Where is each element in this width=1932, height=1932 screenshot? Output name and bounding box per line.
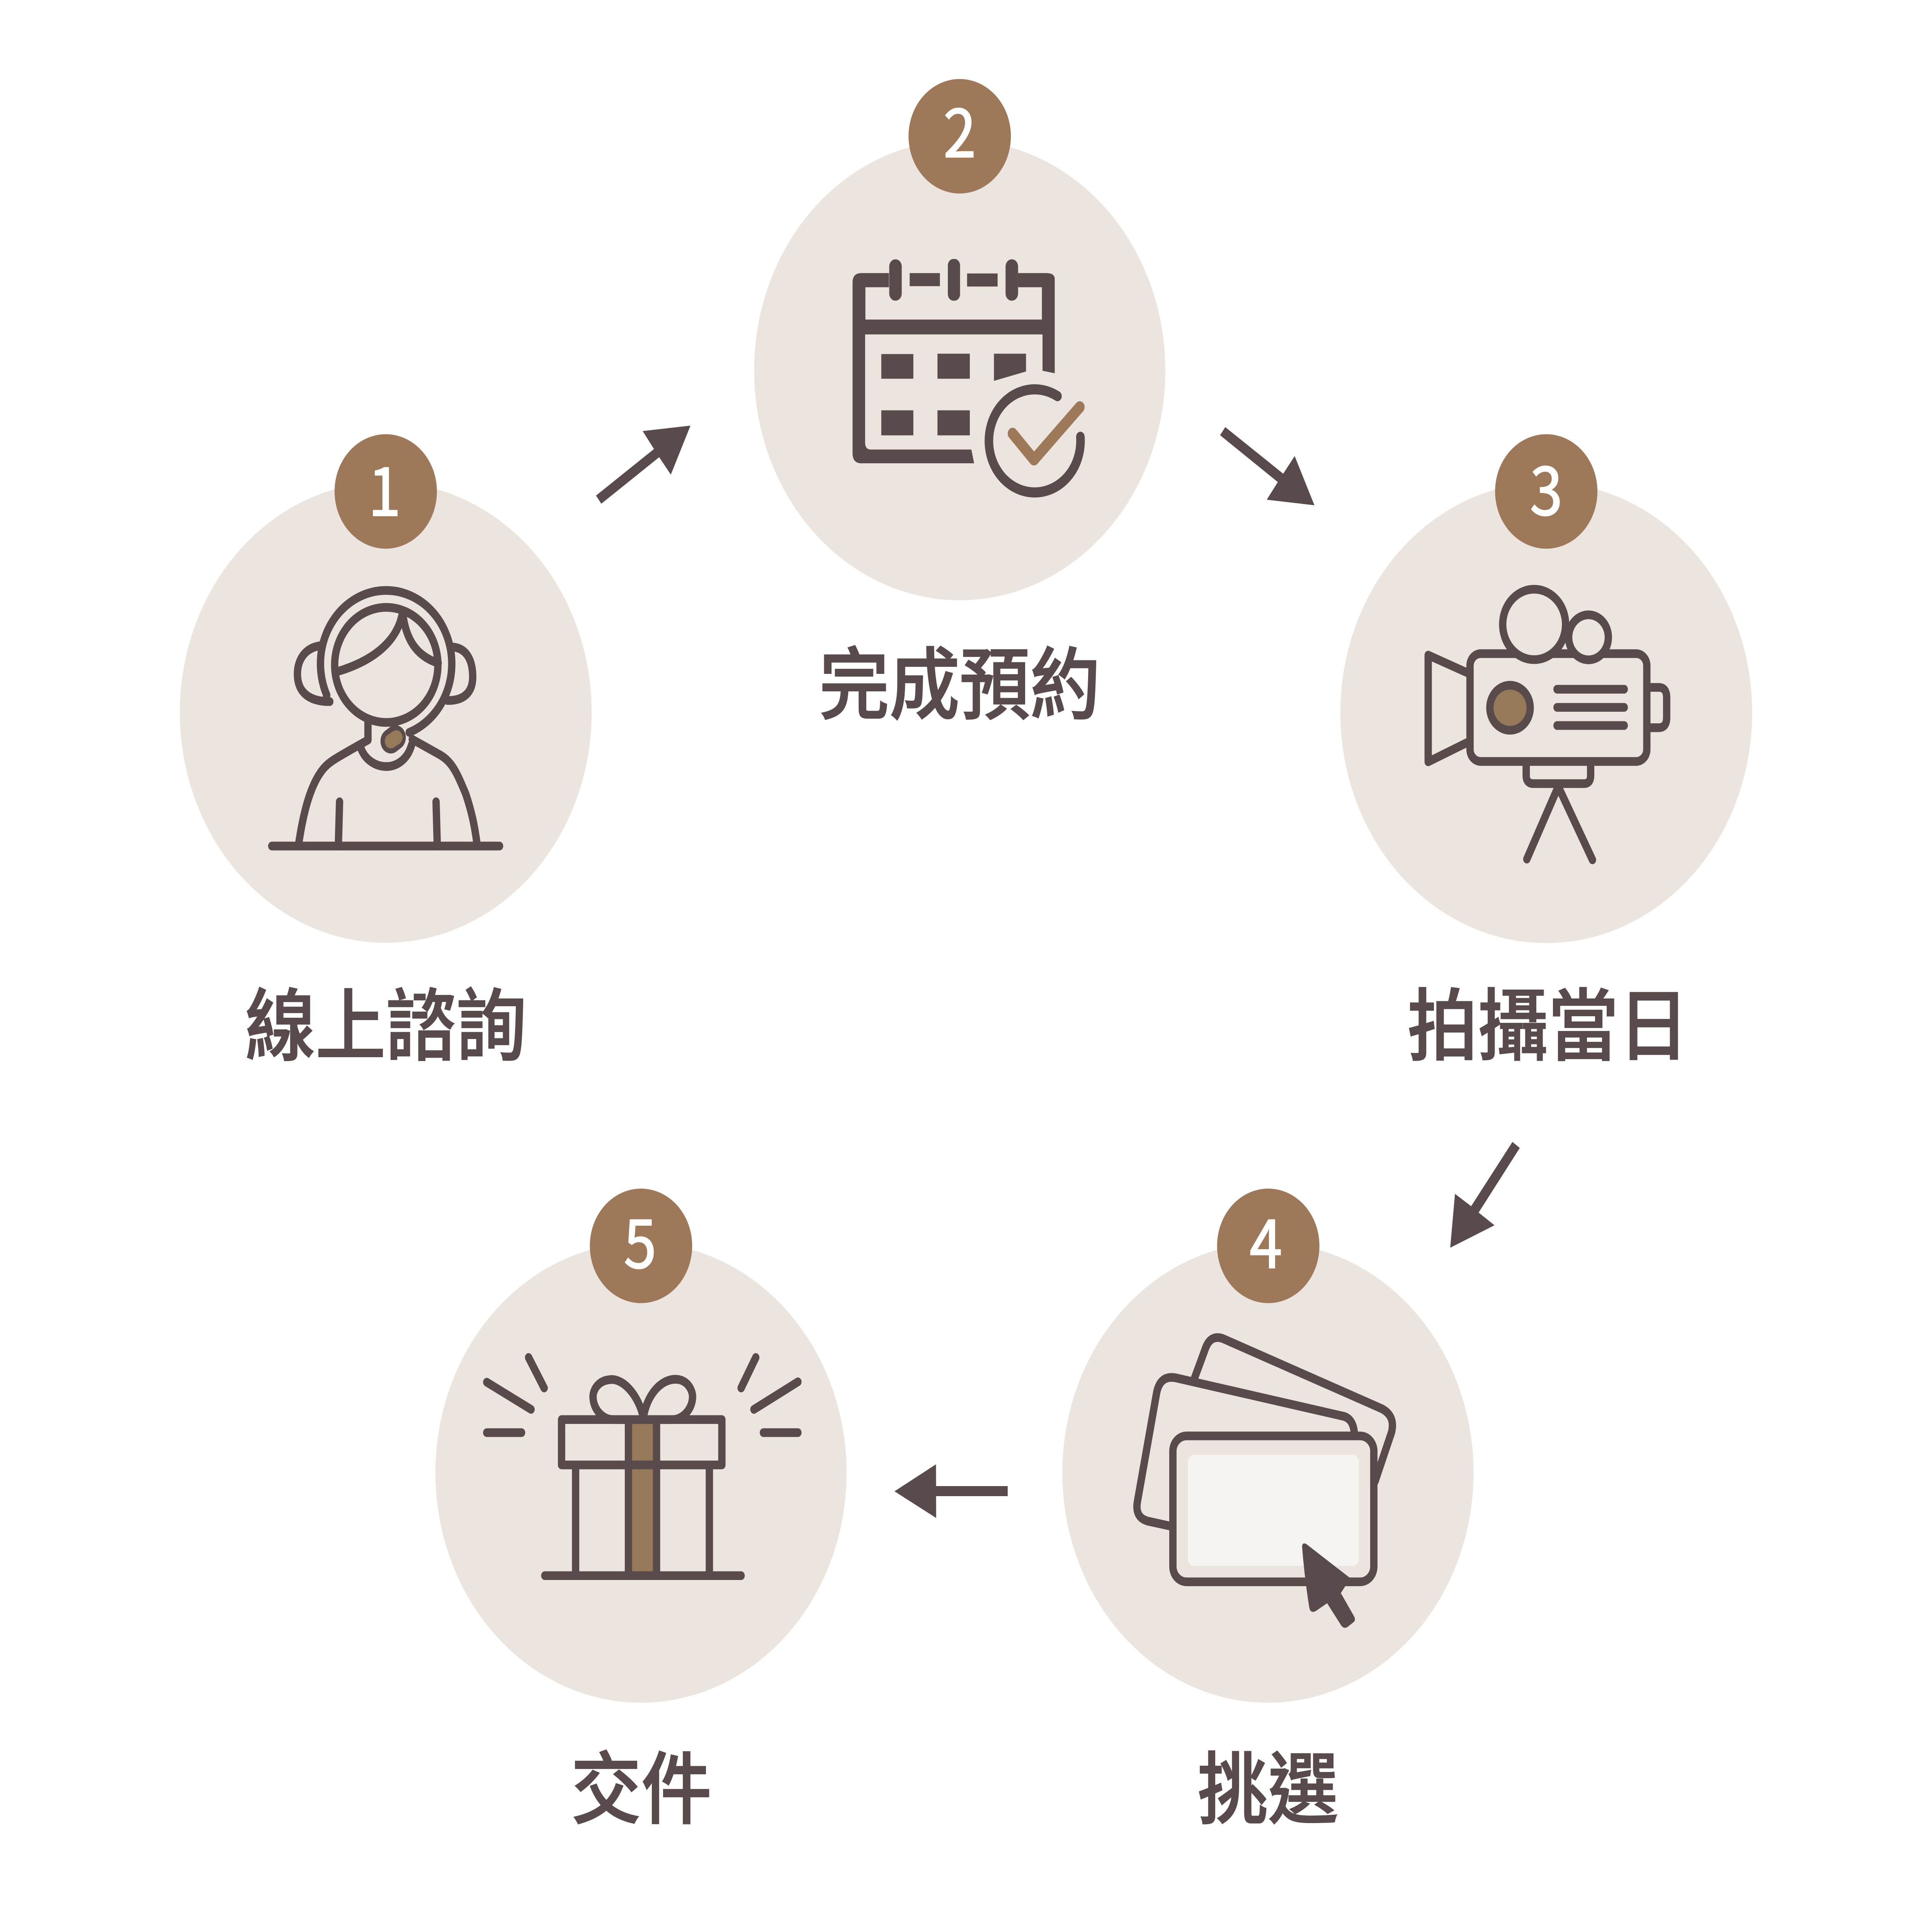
icon: gift box with sparkle lines (487, 1357, 798, 1576)
step 4 number badge (1217, 1189, 1320, 1303)
icon: calendar with check mark (852, 259, 1080, 492)
step 3 background circle (1340, 482, 1752, 943)
step 3 number badge: 3 (1530, 439, 1563, 534)
icon: photo cards with cursor (1137, 1338, 1393, 1628)
step 1 label: 線上諮詢 (245, 983, 526, 1071)
step 5 label: 交件 (571, 1746, 712, 1834)
step 4 background circle (1062, 1243, 1474, 1703)
icon: film camera on tripod (1428, 589, 1667, 860)
step 5: delivery (435, 1189, 847, 1834)
step 2 number badge (908, 79, 1011, 194)
step 3 label: 拍攝當日 (1407, 983, 1689, 1071)
step 1: online consultation (180, 434, 592, 1071)
arrow: step 2 to step 3 (1220, 427, 1315, 505)
step 5 number badge (590, 1189, 692, 1303)
step 1 number badge: 1 (368, 440, 401, 535)
step 4 number badge: 4 (1250, 1192, 1282, 1287)
arrow: step 3 to step 4 (1450, 1142, 1520, 1248)
arrow: step 1 to step 2 (596, 425, 690, 504)
step 2: booking complete (754, 79, 1165, 730)
step 5 number badge: 5 (624, 1192, 656, 1287)
step 2 number badge: 2 (944, 82, 976, 176)
step 3 number badge (1495, 434, 1597, 549)
step 1 background circle (180, 482, 592, 943)
step 4: selection (1062, 1189, 1474, 1834)
step 4 label: 挑選 (1197, 1746, 1338, 1834)
arrow: step 4 to step 5 (895, 1464, 1008, 1518)
icon: customer service agent (272, 590, 500, 846)
step 1 number badge (335, 434, 437, 549)
step 2 background circle (754, 140, 1165, 600)
step 2 label: 完成預約 (819, 641, 1100, 730)
step 5 background circle (435, 1243, 847, 1703)
step 3: shooting day (1340, 434, 1752, 1071)
